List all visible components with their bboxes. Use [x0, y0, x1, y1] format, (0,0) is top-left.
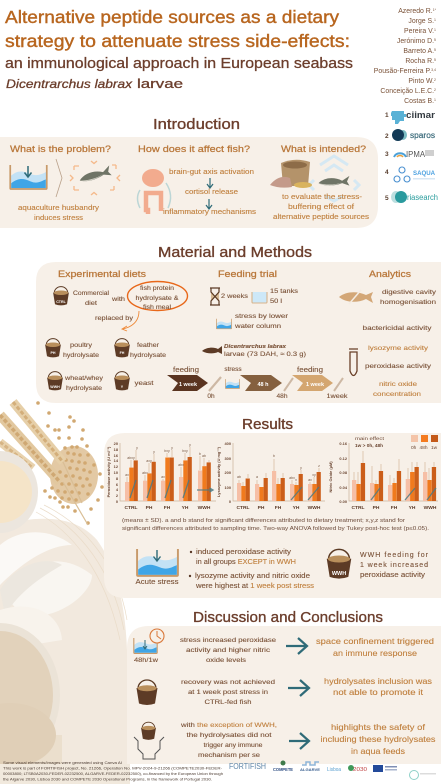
heading: Results: Results — [242, 416, 293, 433]
text: analyses list: bactericidal activity — [362, 325, 432, 332]
timeline: feeding, stress, recovery: 1week — [326, 393, 348, 400]
text: highlights the safety — [320, 723, 436, 756]
panel: material and methods — [36, 262, 441, 403]
chart: peroxidase activity: 0 — [116, 499, 118, 504]
footer: funding text: 00003800; LTSB0A2030-FEDER-02232500, ALGARVE-FEDER-02232500), co-financed by the European Union through — [3, 771, 223, 776]
text: species and larvae — [224, 344, 306, 358]
text: WWH feeding result: peroxidase activity — [360, 572, 426, 579]
chart: peroxidase activity — [106, 441, 216, 511]
text: stress increased: stress increased peroxidase — [180, 637, 276, 644]
icon: lower water tank — [216, 319, 232, 329]
text: stress result bullets: lysozyme activity and nitric oxide — [195, 573, 310, 580]
text: WWH feeding result: WWH feeding for — [360, 552, 429, 559]
callout: fish protein hydrolysate and fish meal: fish meal — [143, 304, 172, 311]
authors: 5 — [434, 48, 436, 52]
text: stress increased: activity and higher nitric — [186, 647, 271, 654]
affiliation logos — [385, 110, 438, 203]
heading: Material and Methods: Material and Methods — [158, 244, 312, 261]
chart: lysozyme activity: Lysozyme activity (U mg⁻¹) — [216, 446, 221, 497]
affiliation logos: SAQUA — [413, 171, 436, 177]
text: main effect: 1w > 0h, 48h — [355, 443, 383, 448]
chart: peroxidase activity: 10 — [114, 470, 118, 475]
arrow — [288, 680, 309, 696]
chart: peroxidase activity: 14 — [114, 458, 119, 463]
text: poultry hydrolysate: hydrolysate — [63, 352, 99, 359]
icon: Y bucket: Y — [121, 385, 124, 389]
icon: CTRL bucket: CTRL — [56, 300, 67, 304]
sub-heading: feeding trial: Feeding trial — [218, 269, 277, 279]
chart: nitric oxide: CTRL — [351, 505, 365, 511]
text: recovery: CTRL-fed fish — [204, 699, 252, 706]
icon: Y bucket — [114, 372, 130, 390]
heading: Discussion and Conclusions: Discussion and Conclusions — [193, 609, 383, 626]
authors: 1 — [434, 18, 436, 22]
affiliation logos: ciimar — [406, 110, 436, 120]
title: strategy to attenuate stress side-effects: — [5, 31, 350, 51]
text: WWH feeding result — [360, 552, 429, 579]
chart: nitric oxide: 0.00 — [339, 499, 347, 504]
chart: lysozyme activity: FH — [275, 505, 282, 511]
icon: tan fish — [339, 290, 373, 304]
footer: funding text: the Algarve 2030, Lisboa 2030 and COMPETE 2030 Operational Programs, in the framework of Portugal 2030. — [3, 776, 212, 782]
arrow — [286, 638, 307, 654]
text: wheat/whey hydrolysate: hydrolysate — [66, 385, 102, 392]
icon: PH bucket — [45, 339, 61, 357]
background: wheat, flour bowls and feathers — [0, 385, 130, 784]
chart: lysozyme activity: 400 — [224, 441, 231, 446]
icon: aquaculture tank — [10, 165, 47, 189]
authors: 3,4 — [431, 68, 436, 72]
affiliation logos: sparos — [410, 131, 435, 140]
chart: peroxidase activity: y — [189, 443, 191, 447]
icon: acute stress tank: Acute stress — [136, 579, 179, 586]
text: analyses list: lysozyme activity — [368, 345, 429, 352]
authors: 2 — [434, 78, 436, 82]
chart: lysozyme activity: 200 — [224, 470, 231, 475]
text: wheat/whey hydrolysate — [64, 375, 104, 392]
timeline: feeding, stress, recovery: 0h — [207, 393, 215, 400]
chart: peroxidase activity: 12 — [114, 464, 119, 469]
text: exception of WWH: mechanism per se — [198, 752, 260, 759]
sub-heading: what is intended: What is intended? — [281, 144, 366, 155]
text: brain-gut axis cascade: brain-gut axis activation — [169, 169, 254, 176]
footer: funder logos: 2030 — [353, 767, 367, 773]
chart: peroxidase activity: CTRL — [124, 505, 138, 511]
title: larvae — [137, 76, 183, 91]
text: brain-gut axis cascade: inflammatory mechanisms — [163, 209, 257, 216]
chart: lysozyme activity: xy — [312, 473, 316, 477]
text: exception of WWH — [180, 722, 277, 759]
text: highlights the safety: in aqua feeds — [351, 747, 405, 756]
text: tanks and volume: 50 l — [270, 298, 283, 305]
icon: tank with clock — [134, 629, 164, 664]
chart: lysozyme activity: x — [295, 478, 297, 482]
icon: WWH bucket: WWH — [50, 385, 60, 389]
footer: funder logos: ALGARVE — [300, 767, 320, 772]
icon: WWH bucket — [47, 372, 63, 390]
chart: peroxidase activity: 16 — [114, 453, 119, 458]
affiliation logos: 3 — [385, 151, 389, 158]
chart: nitric oxide: YH — [409, 505, 416, 511]
text: main effect: main effect — [355, 436, 385, 442]
chart: peroxidase activity: ax — [125, 473, 129, 477]
chart: peroxidase activity: bxy — [164, 449, 170, 453]
authors — [374, 8, 437, 105]
chart: nitric oxide: 0.12 — [339, 456, 348, 461]
text: feather hydrolysate: feather — [137, 342, 160, 349]
text: main effect — [355, 436, 385, 448]
authors: Pereira V. — [404, 28, 434, 35]
arrow: replaced by — [95, 311, 139, 331]
chart: nitric oxide — [328, 435, 438, 511]
authors: Costas B. — [404, 98, 434, 105]
legend: sampling time — [411, 435, 438, 451]
icon: WWH bucket large: WWH — [332, 571, 346, 577]
footer: funder logos: Lisboa — [327, 767, 341, 773]
footer: funder logos — [229, 760, 436, 780]
panel: introduction — [0, 137, 378, 228]
title: an immunological approach in European seabass — [5, 55, 353, 72]
legend: sampling time: 1w — [431, 445, 438, 451]
text: evaluate stress buffering — [273, 194, 370, 221]
text: analyses list: concentration — [373, 391, 421, 398]
authors: 5 — [434, 58, 436, 62]
text: stress increased: oxide levels — [206, 657, 247, 664]
footer: funder logos: COMPETE — [273, 767, 293, 772]
text: feather hydrolysate: hydrolysate — [130, 352, 166, 359]
legend: sampling time: 48h — [420, 445, 428, 451]
chart: peroxidase activity: y — [136, 446, 138, 450]
chart: lysozyme activity: abx — [289, 476, 295, 480]
chart: peroxidase activity: 2 — [116, 493, 119, 498]
icon: tank with clock: 48h/1w — [134, 657, 159, 664]
text: brain-gut axis cascade: cortisol release — [185, 189, 238, 196]
text: exception of WWH: with the exception of WWH, — [180, 722, 277, 729]
legend: sampling time: 0h — [411, 445, 417, 451]
footer: funding text: Some visual elements/images were generated using Canva AI — [3, 760, 122, 765]
chart: peroxidase activity: WWH — [198, 505, 211, 511]
text: digestive cavity homogenisation: digestive cavity — [382, 289, 437, 296]
icon: chevron divider — [56, 159, 62, 197]
authors: 1 — [434, 98, 436, 102]
chart: nitric oxide: 0.08 — [339, 470, 348, 475]
sub-heading: experimental diets: Experimental diets — [58, 269, 147, 279]
icon: CTRL bucket — [53, 287, 69, 305]
timeline: feeding, stress, recovery: 48 h — [257, 382, 269, 388]
authors: Pousão-Ferreira P. — [374, 68, 431, 75]
authors: 1 — [434, 28, 436, 32]
icon: FH bucket: FH — [120, 351, 125, 355]
chart: nitric oxide: FH — [391, 505, 398, 511]
text: evaluate stress buffering: to evaluate the stress- — [282, 194, 363, 201]
text: commercial diet — [73, 290, 110, 307]
chart: lysozyme activity: ax — [308, 478, 312, 482]
text: evaluate stress buffering: buffering effect of — [288, 204, 354, 211]
chart: peroxidase activity: FH — [164, 505, 171, 511]
chart: lysozyme activity: WWH — [308, 505, 321, 511]
title: Alternative peptide sources as a dietary — [5, 7, 339, 27]
chart: peroxidase activity: ax — [161, 475, 165, 479]
chart: peroxidase activity: YH — [182, 505, 189, 511]
chart: peroxidase activity: 20 — [114, 441, 118, 446]
icon: WWH bucket large — [327, 549, 351, 579]
text: aquaculture husbandry — [18, 205, 100, 222]
affiliation logos: 5 — [385, 195, 389, 202]
callout: fish protein hydrolysate and fish meal: fish protein — [140, 285, 174, 292]
authors: 5 — [434, 38, 436, 42]
text: analyses list: nitric oxide — [379, 381, 417, 388]
timeline: feeding, stress, recovery: 1 week — [179, 382, 198, 388]
icon: FH bucket — [114, 339, 130, 357]
chart: lysozyme activity: PH — [258, 505, 265, 511]
chart: peroxidase activity: y — [153, 450, 155, 454]
chart: lysozyme activity: y — [300, 466, 302, 470]
text: recovery: at 1 week post stress in — [188, 689, 268, 696]
text: highlights the safety: highlights the safety of — [331, 723, 426, 732]
text: hydrolysates inclusion — [324, 677, 432, 697]
chart: peroxidase activity: bxy — [182, 449, 188, 453]
chart: lysozyme activity: ab — [237, 475, 241, 479]
icon: test tube — [349, 349, 358, 376]
chart: peroxidase activity: b — [199, 452, 201, 456]
chart: lysozyme activity: b — [273, 454, 275, 458]
text: analyses list: peroxidase activity — [365, 363, 432, 370]
text: digestive cavity homogenisation: homogenisation — [380, 299, 436, 306]
text: species and larvae: larvae (73 DAH, ≈ 0.3 g) — [224, 351, 306, 358]
text: hydrolysates inclusion: hydrolysates inclusion was — [324, 677, 432, 686]
text: statistics caption — [122, 518, 429, 532]
text: exception of WWH: the hydrolysates did not — [186, 732, 272, 739]
text: aquaculture husbandry: aquaculture husbandry — [18, 205, 100, 212]
affiliation logos: 1 — [385, 112, 389, 119]
text: tanks and volume: 15 tanks — [270, 288, 299, 295]
text: space confinement: space confinement triggered — [316, 637, 434, 646]
text: analyses list — [362, 325, 432, 398]
text: stress increased — [180, 637, 276, 664]
text: stress by lower water column: water column — [234, 323, 281, 330]
icon: seabass silhouette — [202, 346, 222, 354]
chart: lysozyme activity: CTRL — [236, 505, 250, 511]
text: WWH feeding result: 1 week increased — [360, 562, 428, 569]
text: with: with — [111, 296, 125, 303]
sub-heading: analytics: Analytics — [369, 269, 412, 279]
timeline: feeding, stress, recovery: 1 week — [306, 382, 325, 388]
text: recovery — [181, 679, 275, 706]
chart: peroxidase activity: PH — [146, 505, 153, 511]
text: poultry hydrolysate: poultry — [70, 342, 93, 349]
chart: nitric oxide: WWH — [424, 505, 437, 511]
icon: brain and gut — [138, 169, 171, 214]
chart: peroxidase activity: abxy — [127, 456, 135, 460]
text: exception of WWH: trigger any immune — [204, 742, 263, 749]
chart: lysozyme activity: 300 — [224, 456, 231, 461]
chart: peroxidase activity: abx — [178, 463, 184, 467]
callout: fish protein hydrolysate and fish meal: hydrolysate & — [136, 295, 179, 302]
icon: hourglass — [210, 288, 220, 305]
chart: peroxidase activity: axy — [146, 459, 152, 463]
chart: lysozyme activity — [216, 441, 325, 511]
text: stress by lower water column — [234, 313, 289, 330]
text: tanks and volume — [270, 288, 299, 305]
sub-heading: how does it affect fish: How does it affect fish? — [138, 144, 250, 155]
footer: funding text — [3, 760, 223, 782]
icon: stressed fish — [70, 161, 120, 195]
icon: bucket — [136, 680, 158, 705]
text: wheat/whey hydrolysate: wheat/whey — [64, 375, 104, 382]
chart: peroxidase activity: 6 — [116, 482, 119, 487]
icon: acute stress tank — [136, 549, 179, 586]
title: Dicentrarchus labrax — [6, 77, 133, 91]
text: commercial diet: Commercial — [73, 290, 110, 297]
chart: peroxidase activity: y — [171, 446, 173, 450]
authors: Jerónimo D. — [397, 38, 434, 45]
icon: bucket held in hands — [134, 722, 164, 759]
text: stress result bullets — [189, 549, 315, 590]
text: yeast: yeast — [134, 380, 154, 387]
chart: peroxidase activity: abx — [142, 471, 148, 475]
icon: peptide ingredients and fish — [270, 156, 359, 201]
icon: PH bucket: PH — [50, 351, 56, 355]
text: stress result bullets: induced peroxidase activity — [196, 549, 292, 556]
text: hydrolysates inclusion: not able to promote it — [333, 688, 424, 697]
footer: funding text: This work is part of FORTIFISH project, No. 21266, Operation No. MPV-2024-9-21266 (COMPETE2030-FEDER- — [3, 766, 223, 770]
panel: discussion and conclusions — [127, 626, 441, 764]
authors: 1* — [433, 8, 437, 12]
text: stress by lower water column: stress by lower — [235, 313, 289, 320]
text: digestive cavity homogenisation — [380, 289, 437, 306]
sub-heading: what is the problem: What is the problem? — [10, 144, 111, 155]
timeline: feeding, stress, recovery: feeding — [297, 367, 323, 374]
affiliation logos: 2 — [385, 133, 389, 140]
chart: lysozyme activity: YH — [293, 505, 300, 511]
text: feather hydrolysate — [130, 342, 166, 359]
chart: peroxidase activity: 18 — [114, 447, 119, 452]
chart: lysozyme activity: 100 — [224, 485, 231, 490]
footer: funder logos: FORTIFISH — [229, 762, 266, 771]
panel: results — [104, 433, 441, 598]
text: commercial diet: diet — [85, 300, 97, 307]
chart: peroxidase activity: 8 — [116, 476, 119, 481]
authors: Conceição L.E.C. — [380, 88, 434, 95]
text: highlights the safety: including these hydrolysates — [320, 735, 436, 744]
affiliation logos: riasearch — [407, 193, 438, 202]
text: space confinement: an immune response — [333, 649, 417, 658]
text: statistics caption: significant differences attributed to sampling time. Two-way ANOVA followed by Tukey post-hoc test (p≤0.05). — [122, 526, 429, 532]
affiliation logos: IPMA — [406, 150, 426, 159]
chart: peroxidase activity: Peroxidase activity (U ml⁻¹) — [106, 446, 111, 497]
chart: nitric oxide: Nitric Oxide (µM) — [328, 461, 333, 492]
timeline: feeding, stress, recovery — [167, 366, 348, 400]
chart: nitric oxide: PH — [373, 505, 380, 511]
timeline: feeding, stress, recovery: 48h — [276, 393, 288, 400]
chart: nitric oxide: 0.16 — [339, 441, 348, 446]
chart: peroxidase activity: 4 — [116, 487, 119, 492]
arrow — [289, 733, 309, 749]
text: aquaculture husbandry: induces stress — [34, 215, 84, 222]
text: evaluate stress buffering: alternative peptide sources — [273, 214, 370, 221]
chart: lysozyme activity: a — [256, 475, 258, 479]
arrow: replaced by: replaced by — [95, 315, 134, 322]
chart: lysozyme activity: z — [318, 464, 320, 468]
text: stress result bullets: in all groups EXCEPT in WWH — [196, 559, 296, 566]
authors: Barreto A. — [403, 48, 434, 55]
authors: 2 — [434, 88, 436, 92]
authors: Azeredo R. — [398, 8, 433, 15]
text: poultry hydrolysate — [63, 342, 99, 359]
heading: Introduction: Introduction — [153, 116, 240, 133]
callout: fish protein hydrolysate and fish meal — [128, 282, 188, 311]
authors: Jorge S. — [408, 18, 434, 25]
title — [5, 7, 353, 91]
timeline: feeding, stress, recovery: feeding — [173, 367, 199, 374]
text: brain-gut axis cascade — [163, 169, 257, 216]
text: statistics caption: (means ± SD). a and b stand for significant differences attributed to dietary treatment; x,y,z stand for — [122, 518, 405, 524]
chart: nitric oxide: 0.04 — [339, 485, 348, 490]
authors: Rocha R. — [405, 58, 434, 65]
affiliation logos: 4 — [385, 169, 389, 176]
text: recovery: recovery was not achieved — [181, 679, 275, 686]
authors: Pinto W. — [408, 78, 434, 85]
text: space confinement — [316, 637, 434, 658]
chart: peroxidase activity: ab — [202, 454, 206, 458]
text: 2 weeks: 2 weeks — [221, 293, 249, 300]
text: stress result bullets: were highest at 1 week post stress — [195, 583, 315, 590]
icon: tank — [252, 292, 267, 303]
chart: lysozyme activity: 0 — [229, 499, 231, 504]
timeline: feeding, stress, recovery: stress — [224, 366, 242, 373]
text: species and larvae: Dicentrarchus labrax — [224, 344, 287, 350]
